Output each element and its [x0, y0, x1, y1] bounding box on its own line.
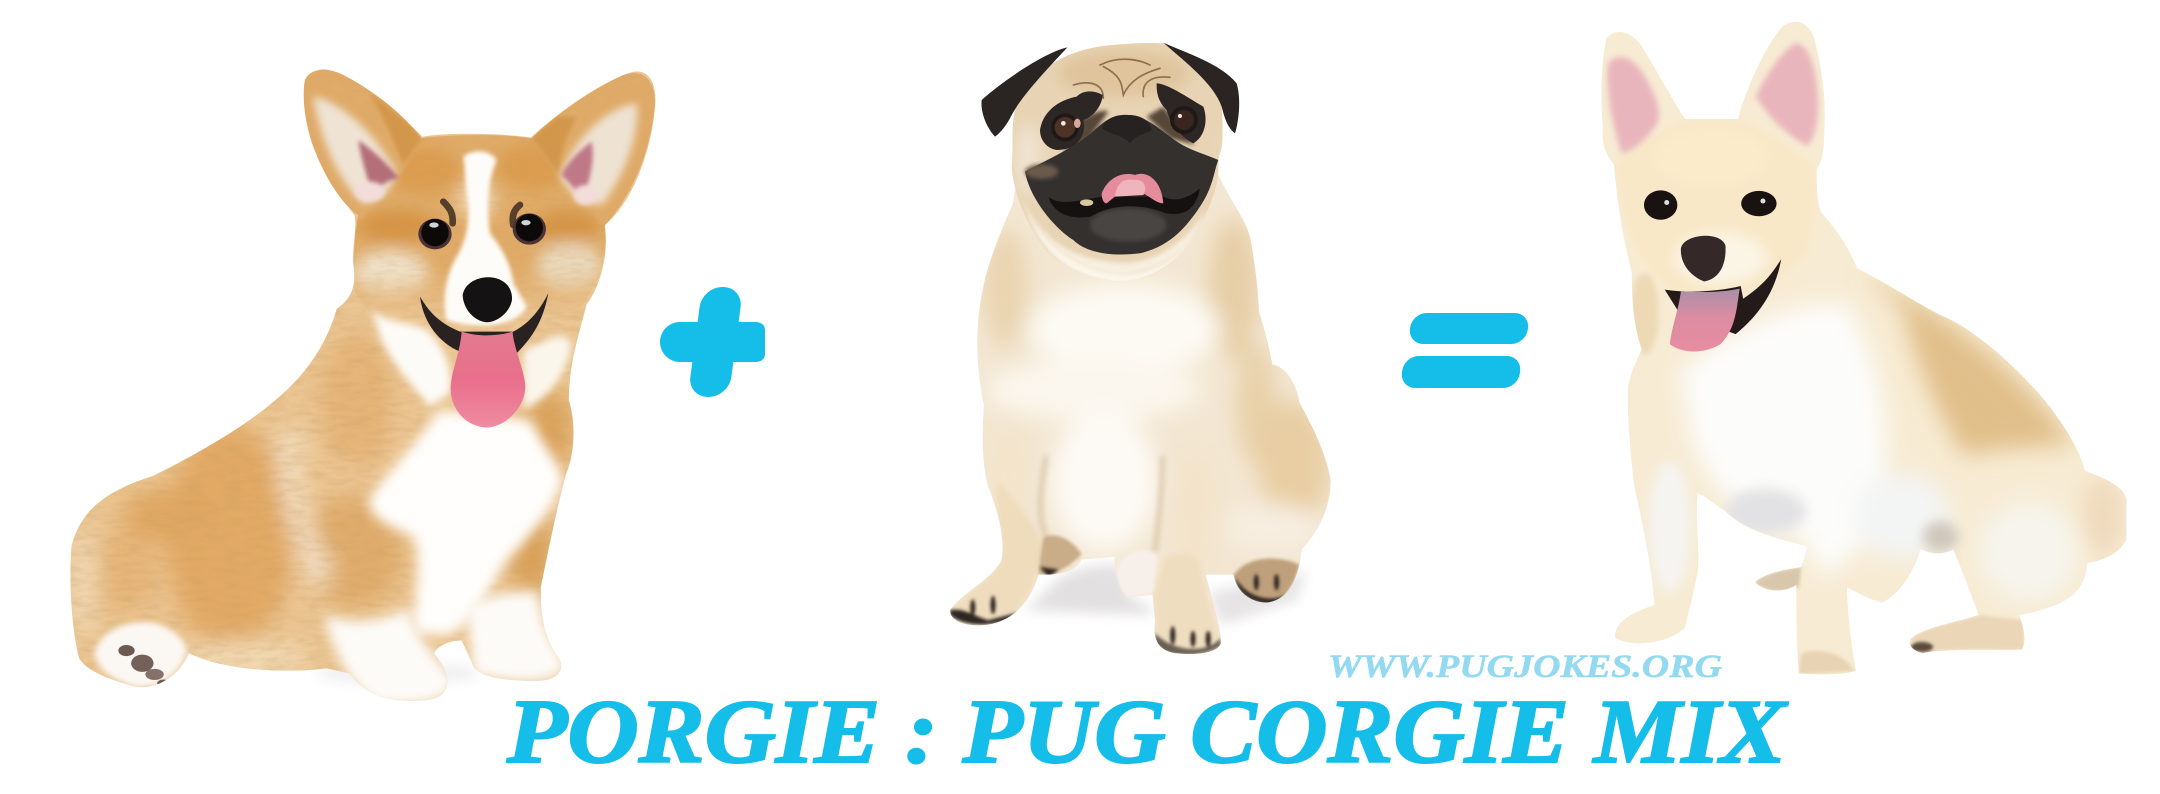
mix front leg: [1649, 461, 1691, 592]
corgi white ruff left: [372, 310, 451, 407]
corgi white blaze and muzzle: [445, 151, 527, 325]
mixed-breed dog photo illustration: [1589, 10, 2136, 684]
corgi eyes: [418, 213, 546, 249]
pug mouth: [1048, 188, 1200, 217]
pug tongue: [1102, 174, 1163, 203]
mix tongue: [1670, 289, 1740, 352]
mix hind paw: [1910, 615, 2024, 653]
mix mouth: [1665, 259, 1781, 334]
corgi head: [304, 70, 655, 428]
mix muzzle: [1675, 233, 1766, 284]
corgi front left leg: [324, 608, 454, 705]
pug nose: [1102, 115, 1152, 143]
pug belly tuft: [1117, 550, 1158, 597]
corgi white chest: [368, 410, 562, 635]
mix head: [1614, 119, 1817, 299]
equals bottom bar: [1400, 356, 1522, 388]
pug muzzle highlights: [1025, 164, 1167, 242]
pug ground shadow: [1023, 565, 1307, 625]
title: PORGIE : PUG CORGIE MIX: [506, 681, 1788, 782]
corgi fur texture head: [360, 202, 596, 288]
pug back paw right: [1234, 558, 1299, 602]
plus sign: [660, 287, 765, 397]
corgi ground shadow: [316, 662, 480, 685]
corgi head fur tones: [352, 143, 603, 297]
equals sign: [1400, 313, 1530, 388]
corgi fur texture: [70, 230, 606, 682]
pug right ear: [1163, 43, 1239, 133]
corgi body and fur: [70, 69, 656, 701]
mix groin shade: [1923, 521, 1958, 552]
pug tongue highlight: [1115, 180, 1145, 197]
pug neck fold: [1024, 206, 1197, 282]
corgi left ear: [300, 70, 422, 220]
website label: WWW.PUGJOKES.ORG: [1328, 649, 1722, 685]
pug paw shading: [950, 567, 1291, 655]
mix belly shade: [1725, 489, 1806, 534]
pug back paw left: [1039, 535, 1082, 575]
mix tan back: [1865, 271, 2123, 557]
corgi front right leg: [467, 592, 566, 682]
pug leg creases: [1040, 456, 1163, 552]
pug left ear: [981, 47, 1067, 137]
mix body and fur: [1589, 10, 2136, 684]
pug head: [981, 40, 1243, 293]
corgi rear paw: [94, 622, 187, 688]
corgi brows: [443, 202, 520, 225]
mix forehead highlight: [1655, 129, 1766, 185]
mix eyes: [1644, 190, 1777, 220]
plus vertical bar: [688, 287, 743, 397]
corgi white ruff right: [523, 336, 572, 410]
corgi right ear: [532, 80, 655, 225]
pug teeth: [1080, 199, 1093, 206]
mix white chest and belly: [1680, 303, 2080, 602]
pug front leg left: [952, 486, 1042, 620]
mix nose: [1681, 236, 1726, 282]
corgi photo illustration: [70, 69, 656, 701]
pug head tones: [1012, 47, 1222, 197]
pug fold band: [1040, 214, 1205, 274]
mix left ear inner: [1607, 57, 1659, 153]
mix far paw: [1755, 567, 1801, 591]
corgi tongue: [451, 332, 525, 428]
pug dark mask: [1025, 115, 1218, 255]
pug front leg right: [1153, 554, 1221, 654]
mix paw pads: [1911, 642, 1933, 652]
equals top bar: [1408, 313, 1530, 344]
corgi mouth: [420, 293, 548, 353]
pug eyes: [1051, 106, 1198, 141]
plus horizontal bar: [660, 322, 765, 362]
mix right ear inner: [1756, 43, 1818, 146]
pug eye patches: [1040, 83, 1206, 150]
pug forehead wrinkles: [1073, 59, 1170, 98]
mix neck shade: [1630, 273, 1659, 354]
mix front paw: [1799, 651, 1855, 674]
pug photo illustration: [942, 40, 1347, 668]
pug brown face shading: [1063, 107, 1195, 153]
corgi nose: [463, 277, 512, 322]
pug body and fur: [950, 174, 1331, 654]
